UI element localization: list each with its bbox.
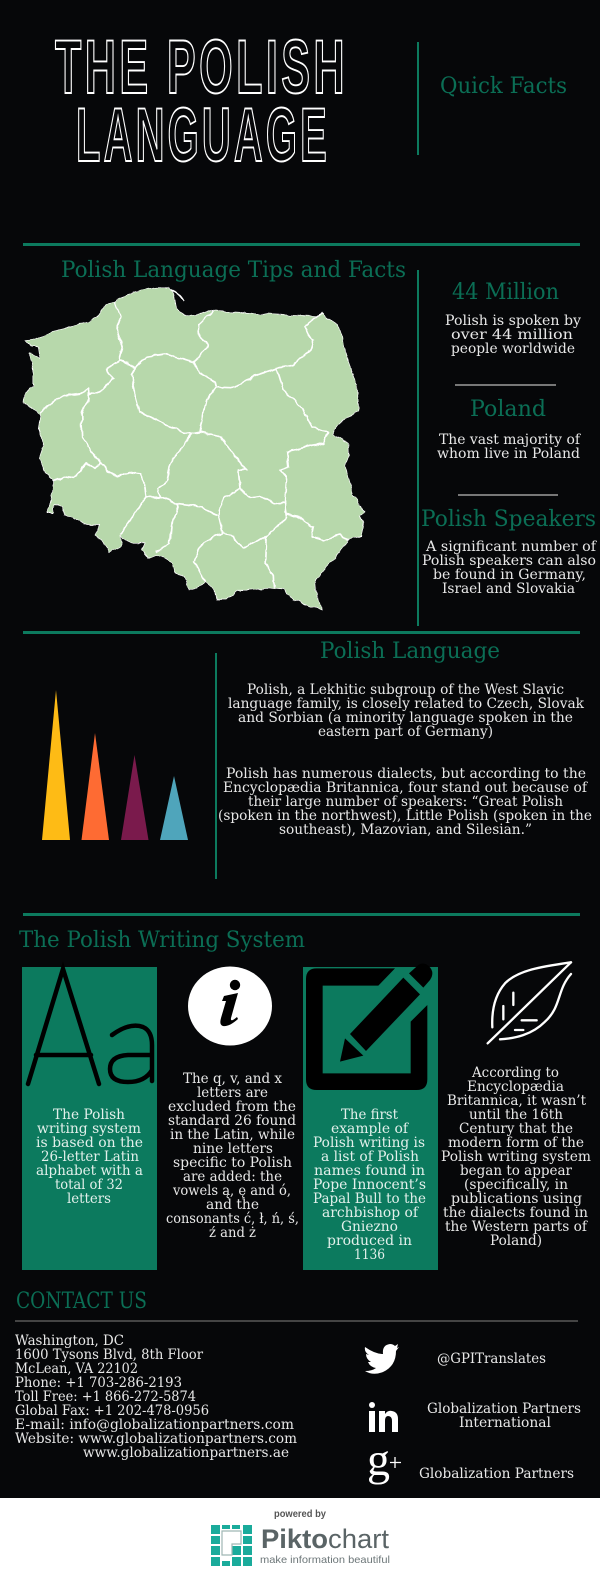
footer: piktochart: make information beautiful [260,1554,390,1566]
fact: Polish speakers: Polish Speakers [421,507,596,532]
panel: excluded letters: consonants ć, ł, ń, ś, [166,1211,299,1227]
contact details: Global Fax: +1 202-478-0956 [15,1403,209,1419]
panel: 16th century: (specifically, in [464,1177,568,1193]
contact details [15,1333,297,1461]
map of Poland [24,288,365,610]
panel: excluded letters: and the [206,1197,259,1213]
icon: leaf [488,962,571,1043]
social: google plus: g [367,1434,390,1485]
contact details: E-mail: info@globalizationpartners.com [15,1417,294,1433]
contact details: www.globalizationpartners.ae [83,1445,289,1461]
panel: 16th century [441,962,591,1249]
contact details: Washington, DC [15,1333,124,1349]
heading: contact us: CONTACT US [16,1289,147,1314]
panel: excluded letters: ź and ż [209,1225,256,1241]
icon: pencil [306,964,432,1090]
heading: tips and facts: Polish Language Tips and Facts [61,258,406,283]
icon: info [188,966,272,1046]
panel: excluded letters: The q, v, and x [183,1071,282,1087]
panel: first example: Polish writing is [313,1135,425,1151]
social: linkedin: International [459,1415,552,1431]
panel: excluded letters: are added: the [183,1169,282,1185]
paragraph: family: Polish, a Lekhitic subgroup of the West Slavic [247,682,564,698]
paragraph: dialects [218,766,592,838]
contact details: McLean, VA 22102 [15,1361,138,1377]
fact: Polish speakers: Israel and Slovakia [442,581,575,597]
panel: first example: The first [341,1107,398,1123]
panel: first example: a list of Polish [321,1149,419,1165]
panel: excluded letters [166,966,299,1241]
panel: excluded letters: nine letters [193,1141,273,1157]
fact: Polish speakers: A significant number of [425,539,598,555]
heading: writing system: The Polish Writing System [19,928,305,953]
fact: Polish speakers: be found in Germany, [433,567,586,583]
panel: alphabet: 26-letter Latin [41,1149,139,1165]
paragraph: dialects: Encyclopædia Britannica, four stand out because of [223,780,589,796]
fact: Poland [437,397,582,462]
paragraph: family: and Sorbian (a minority language spoken in the [238,710,573,726]
panel: excluded letters: specific to Polish [173,1155,292,1171]
panel: first example: archbishop of [322,1205,420,1221]
panel: excluded letters: letters are [197,1085,268,1101]
panel: excluded letters: excluded from the [168,1099,296,1115]
panel: 16th century: the dialects found in [443,1205,588,1221]
fact: 44 million: 44 Million [452,280,559,305]
fact: 44 million: people worldwide [451,341,575,357]
panel: 16th century: publications using [451,1191,582,1207]
contact details: Toll Free: +1 866-272-5874 [15,1389,196,1405]
fact: 44 million: over 44 million [451,327,573,343]
social: google plus [367,1434,574,1485]
triangles chart [42,690,188,840]
panel: first example: names found in [314,1163,425,1179]
panel: excluded letters: in the Latin, while [170,1127,295,1143]
panel: excluded letters: vowels ą, ę and ó, [172,1183,291,1199]
footer: piktochart [0,1498,600,1578]
title [55,25,348,178]
fact: 44 million [445,280,581,357]
panel: alphabet [22,967,157,1270]
panel: 16th century: modern form of the [448,1135,584,1151]
title: LANGUAGE [76,93,330,178]
panel: alphabet: The Polish [53,1107,125,1123]
panel: 16th century: According to [471,1065,559,1081]
paragraph: family: language family, is closely related to Czech, Slovak [228,696,584,712]
title: THE POLISH [55,25,348,110]
panel: first example: Gniezno [341,1219,398,1235]
paragraph: family [228,682,584,740]
panel: 16th century: Century that the [459,1121,573,1137]
fact: Poland: Poland [470,397,546,422]
fact: 44 million: Polish is spoken by [445,313,581,329]
heading: polish language: Polish Language [320,639,500,664]
paragraph: dialects: southeast), Mazovian, and Silesian.” [279,822,532,838]
social: google plus: Globalization Partners [419,1466,574,1482]
contact details: 1600 Tysons Blvd, 8th Floor [15,1347,203,1363]
paragraph: family: eastern part of Germany) [318,724,493,740]
fact: Poland: whom live in Poland [437,446,580,462]
social: linkedin: Globalization Partners [427,1401,581,1417]
paragraph: dialects: their large number of speakers: “Great Polish [248,794,563,810]
contact details: Website: www.globalizationpartners.com [15,1431,297,1447]
panel: alphabet: writing system [37,1121,141,1137]
panel: first example: Papal Bull to the [313,1191,426,1207]
panel: alphabet: total of 32 [55,1177,123,1193]
social: linkedin [369,1401,581,1432]
fact: Polish speakers: Polish speakers can also [422,553,596,569]
panel: first example [303,964,438,1270]
panel: 16th century: Polish writing system [441,1149,591,1165]
footer: piktochart: powered by [274,1509,326,1520]
icon: Aa [28,969,152,1084]
panel: 16th century: the Western parts of [445,1219,589,1235]
contact details: Phone: +1 703-286-2193 [15,1375,182,1391]
panel: alphabet: alphabet with a [36,1163,143,1179]
heading: quick facts: Quick Facts [440,74,567,99]
panel: 16th century: Poland) [490,1233,542,1249]
footer: piktochart: Piktochart [261,1524,389,1554]
paragraph: dialects: Polish has numerous dialects, but according to the [226,766,586,782]
panel: 16th century: Britannica, it wasn’t [447,1093,586,1109]
fact: Polish speakers [421,507,598,597]
icon: piktochart logo [211,1525,252,1566]
panel: first example: 1136 [354,1247,385,1263]
panel: alphabet: letters [67,1191,111,1207]
panel: alphabet: is based on the [36,1135,143,1151]
panel: excluded letters: standard 26 found [168,1113,296,1129]
panel: first example: produced in [327,1233,412,1249]
panel: 16th century: until the 16th [469,1107,563,1123]
panel: 16th century: Encyclopædia [467,1079,564,1095]
fact: Poland: The vast majority of [439,432,582,448]
paragraph: dialects: (spoken in the northwest), Little Polish (spoken in the [218,808,592,824]
panel: 16th century: began to appear [460,1163,572,1179]
panel: first example: Pope Innocent’s [313,1177,426,1193]
social: twitter: @GPITranslates [437,1351,546,1367]
social: twitter [365,1344,546,1374]
panel: first example: example of [331,1121,410,1137]
